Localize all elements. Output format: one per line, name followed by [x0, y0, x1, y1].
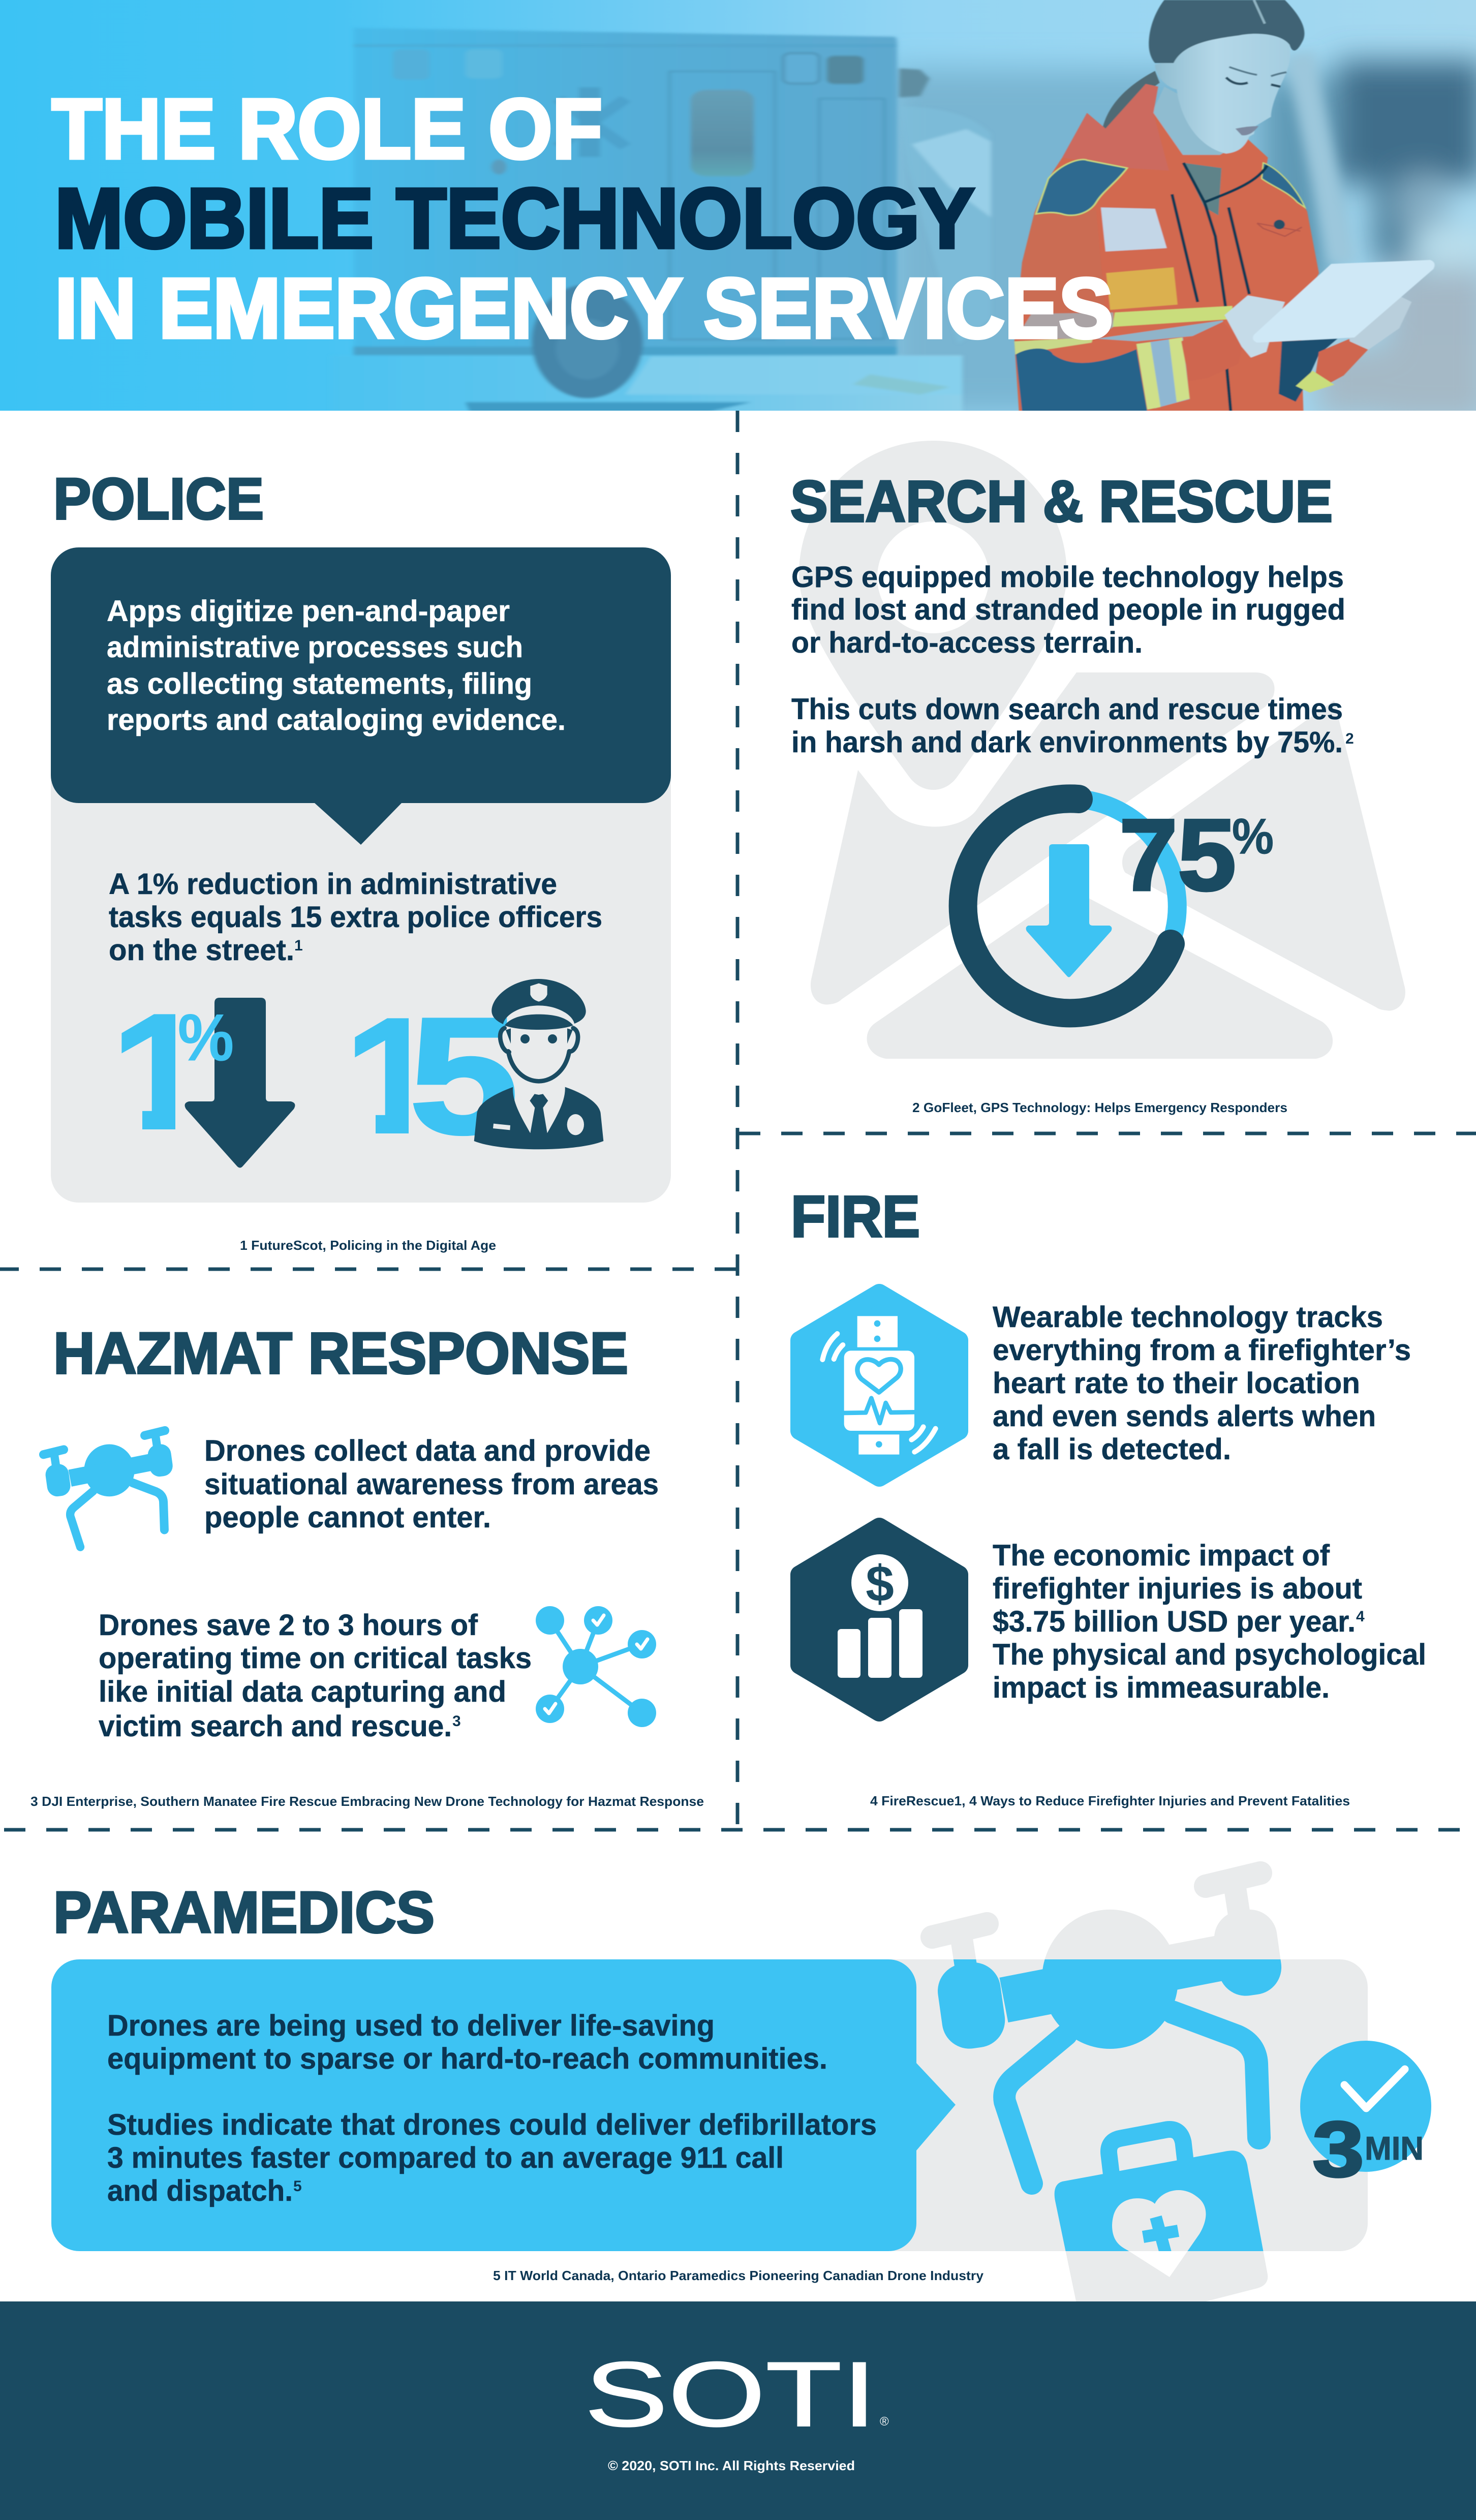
header banner with ambulance and paramedic illustration	[0, 0, 1476, 422]
text: drones save time	[99, 1609, 532, 1743]
text: drones save time: Drones save 2 to 3 hours of	[99, 1609, 478, 1642]
text: wearable technology: and even sends alerts when	[993, 1400, 1376, 1433]
text: drones save time: like initial data capturing and	[99, 1675, 506, 1708]
text: drones save time: 3	[452, 1713, 461, 1730]
ambulance photo	[330, 28, 991, 412]
text: bubble copy	[107, 595, 566, 736]
text: paramedics copy: 3 minutes faster compared to an average 911 call	[107, 2141, 784, 2174]
text: search and rescue description: or hard-to-access terrain.	[791, 626, 1143, 659]
heading: paramedics: PARAMEDICS	[53, 1880, 435, 1945]
text: search and rescue description: GPS equipped mobile technology helps	[791, 561, 1344, 594]
chart: 75 percent progress ring	[963, 798, 1274, 1013]
footnote 4: 4 FireRescue1, 4 Ways to Reduce Firefighter Injuries and Prevent Fatalities	[870, 1793, 1350, 1808]
footnote 1: 1 FutureScot, Policing in the Digital Age	[240, 1238, 496, 1253]
title: IN EMERGENCY SERVICES	[55, 261, 1113, 356]
text: drones collect data	[204, 1434, 659, 1534]
text: search and rescue description	[791, 561, 1354, 759]
text: bubble copy: administrative processes such	[107, 631, 523, 664]
text: economic impact: The physical and psychological	[993, 1638, 1426, 1671]
text: wearable technology: heart rate to their location	[993, 1367, 1360, 1400]
text: bubble copy: as collecting statements, filing	[107, 667, 532, 700]
icon: small drone	[44, 1430, 174, 1547]
title	[52, 82, 1113, 356]
icon: dollar and bars in dark hexagon: $	[866, 1555, 894, 1612]
heading: police: POLICE	[53, 467, 264, 532]
heading: fire: FIRE	[791, 1184, 920, 1249]
icon: network of checkmarks	[536, 1606, 656, 1727]
stat: 3 minutes badge: MIN	[1365, 2130, 1424, 2167]
footnote 2: 2 GoFleet, GPS Technology: Helps Emergency Responders	[912, 1100, 1287, 1115]
light pillar behind paramedic	[1286, 52, 1348, 265]
text: economic impact: 4	[1356, 1608, 1365, 1625]
text: paramedics copy	[107, 2009, 877, 2207]
stat: 3 minutes badge	[1300, 2041, 1431, 2193]
copyright: © 2020, SOTI Inc. All Rights Reservied	[608, 2458, 855, 2473]
icon: police officer	[474, 979, 603, 1149]
text: reduction statement: A 1% reduction in administrative	[109, 868, 557, 901]
title: THE ROLE OF	[52, 82, 602, 176]
icon: dark down arrow	[185, 998, 295, 1168]
panel: paramedics illustration	[51, 1873, 1431, 2333]
icon: down arrow	[1026, 844, 1112, 977]
text: paramedics copy: and dispatch.	[107, 2174, 293, 2207]
icon: drone carrying medical kit	[938, 1959, 1282, 2251]
footnote 5: 5 IT World Canada, Ontario Paramedics Pioneering Canadian Drone Industry	[493, 2268, 984, 2283]
stat: 75 percent: 75	[1119, 798, 1236, 912]
stat: 3 minutes badge: 3	[1312, 2105, 1364, 2193]
logo: SOTI: SOTI	[585, 2343, 877, 2446]
text: wearable technology: Wearable technology tracks	[993, 1301, 1383, 1334]
stat: 15 officers	[355, 1018, 515, 1136]
text: economic impact: The economic impact of	[993, 1539, 1330, 1572]
text: reduction statement: tasks equals 15 extra police officers	[109, 901, 602, 934]
text: drones save time: operating time on critical tasks	[99, 1642, 532, 1675]
text: reduction statement: on the street.	[109, 934, 294, 967]
text: search and rescue description: in harsh and dark environments by 75%.	[791, 726, 1343, 759]
text: reduction statement: 1	[294, 937, 303, 954]
logo: SOTI: ®	[880, 2415, 889, 2429]
heading: hazmat response: HAZMAT RESPONSE	[53, 1321, 628, 1386]
text: wearable technology	[993, 1301, 1411, 1466]
text: economic impact: impact is immeasurable.	[993, 1671, 1330, 1704]
text: economic impact	[993, 1539, 1426, 1704]
text: paramedics copy: Studies indicate that drones could deliver defibrillators	[107, 2108, 877, 2141]
stat: 15 officers: 5	[409, 984, 518, 1168]
text: paramedics copy: 5	[293, 2178, 302, 2195]
stat: 1 percent: 1	[110, 979, 212, 1164]
callout: police speech bubble	[51, 547, 671, 845]
text: bubble copy: Apps digitize pen-and-paper	[107, 595, 510, 628]
footnote 3: 3 DJI Enterprise, Southern Manatee Fire Rescue Embracing New Drone Technology for Hazmat Response	[30, 1794, 704, 1809]
footer	[0, 2301, 1476, 2520]
callout: paramedics bubble	[51, 1959, 956, 2251]
stat: 15 officers: 1	[344, 984, 445, 1168]
text: wearable technology: everything from a firefighter’s	[993, 1334, 1411, 1367]
stat: 75 percent: %	[1232, 808, 1274, 864]
icon: wearable in cyan hexagon	[800, 1293, 959, 1478]
text: paramedics copy: Drones are being used to deliver life-saving	[107, 2009, 715, 2042]
text: bubble copy: reports and cataloging evidence.	[107, 703, 566, 736]
text: wearable technology: a fall is detected.	[993, 1433, 1231, 1466]
text: paramedics copy: equipment to sparse or hard-to-reach communities.	[107, 2042, 827, 2075]
text: drones collect data: situational awareness from areas	[204, 1468, 659, 1501]
text: economic impact: firefighter injuries is about	[993, 1572, 1362, 1605]
text: reduction statement	[109, 868, 602, 967]
text: search and rescue description: 2	[1345, 730, 1354, 747]
text: drones collect data: people cannot enter.	[204, 1501, 491, 1534]
text: drones collect data: Drones collect data and provide	[204, 1434, 651, 1467]
text: search and rescue description: This cuts down search and rescue times	[791, 693, 1343, 726]
text: search and rescue description: find lost and stranded people in rugged	[791, 593, 1345, 626]
paramedic photo	[1014, 0, 1435, 412]
text: economic impact: $3.75 billion USD per year.	[993, 1605, 1356, 1638]
panel: police	[51, 547, 671, 1203]
icon: dollar and bars in dark hexagon	[800, 1527, 959, 1712]
stat: 1 percent	[121, 1014, 233, 1129]
background icon: map and pin	[799, 441, 1405, 1059]
stat: 1 percent: %	[178, 1000, 234, 1074]
heading: search and rescue: SEARCH & RESCUE	[790, 469, 1333, 534]
text: drones save time: victim search and rescue.	[99, 1710, 452, 1743]
title: MOBILE TECHNOLOGY	[55, 171, 974, 266]
